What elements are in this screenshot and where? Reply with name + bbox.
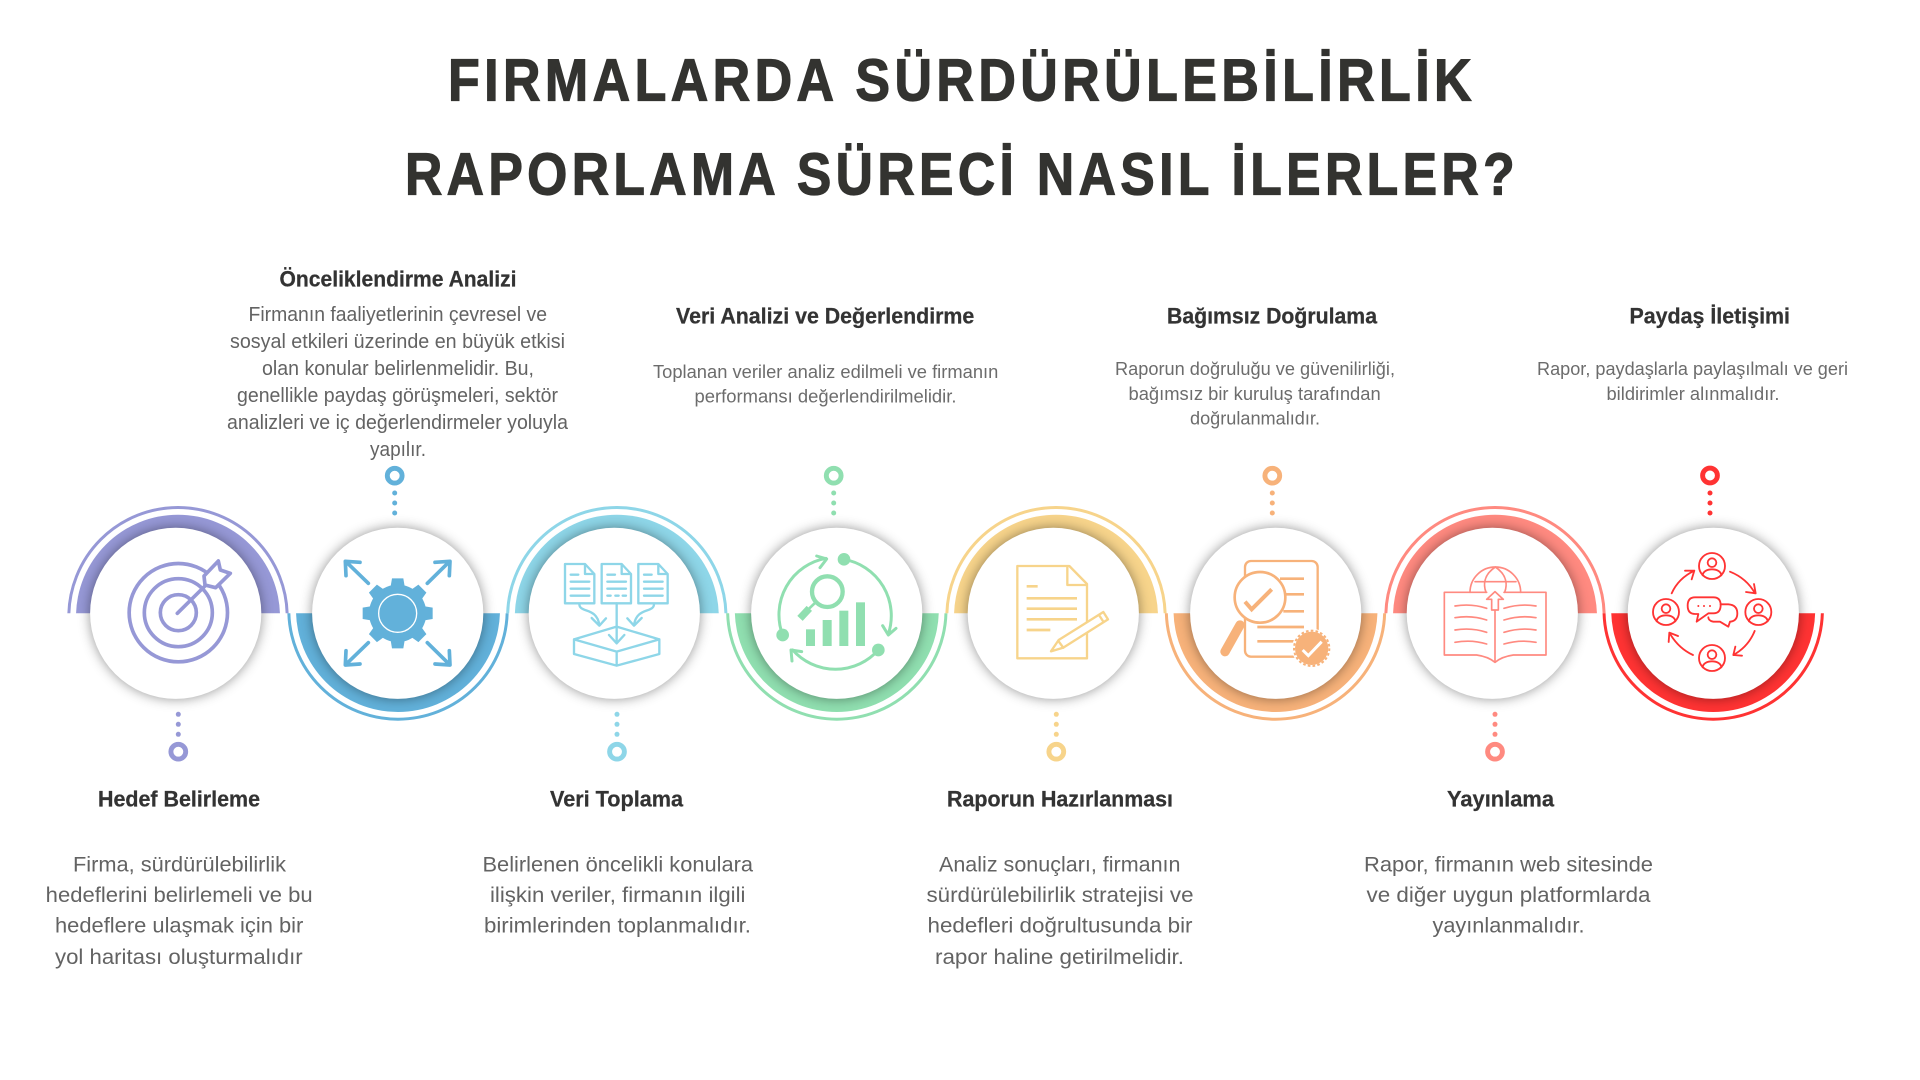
description: yol haritası oluşturmalıdır xyxy=(55,945,303,969)
arc band salmon xyxy=(1384,506,1606,614)
icon: open book and globe xyxy=(1444,567,1546,662)
description xyxy=(227,304,569,461)
white circle xyxy=(1407,528,1578,699)
white circle xyxy=(751,528,922,699)
description: ve diğer uygun platformlarda xyxy=(1366,883,1651,907)
description: ilişkin veriler, firmanın ilgili xyxy=(490,883,746,907)
icon: gear with arrows xyxy=(345,561,450,665)
icon: verified report xyxy=(1225,561,1331,668)
description: olan konular belirlenmelidir. Bu, xyxy=(262,358,534,380)
title: FIRMALARDA SÜRDÜRÜLEBİLİRLİK xyxy=(448,48,1476,114)
step 4: Veri Analizi ve Değerlendirme xyxy=(653,303,998,719)
description: performansı değerlendirilmelidir. xyxy=(694,386,956,406)
heading: Önceliklendirme Analizi xyxy=(280,266,516,292)
description: Belirlenen öncelikli konulara xyxy=(482,852,753,876)
description xyxy=(653,362,998,406)
step 7: Yayınlama xyxy=(1364,508,1653,938)
description xyxy=(926,852,1194,969)
description: yayınlanmalıdır. xyxy=(1432,914,1584,938)
description xyxy=(1537,359,1848,404)
arc band purple xyxy=(67,506,289,614)
heading: Raporun Hazırlanması xyxy=(947,787,1173,812)
icon: stakeholders communication xyxy=(1653,553,1771,671)
icon: document and pencil xyxy=(1017,566,1108,658)
description xyxy=(482,852,753,938)
white circle xyxy=(1628,528,1799,699)
white circle xyxy=(968,528,1139,699)
description: birimlerinden toplanmalıdır. xyxy=(484,914,751,938)
heading: Veri Toplama xyxy=(550,787,684,812)
description: Rapor, firmanın web sitesinde xyxy=(1364,852,1653,876)
heading: Paydaş İletişimi xyxy=(1630,303,1790,328)
description: Firma, sürdürülebilirlik xyxy=(73,852,286,876)
icon: target xyxy=(129,561,230,662)
arc band red xyxy=(1602,613,1824,721)
pin xyxy=(171,712,186,759)
white circle xyxy=(529,528,700,699)
description: analizleri ve iç değerlendirmeler yoluyla xyxy=(227,412,569,434)
description: Toplanan veriler analiz edilmeli ve firmanın xyxy=(653,362,998,382)
description: Analiz sonuçları, firmanın xyxy=(939,852,1180,876)
white circle xyxy=(1190,528,1361,699)
step 2: Önceliklendirme Analizi xyxy=(227,266,569,719)
pin xyxy=(610,712,624,759)
description xyxy=(1364,852,1653,938)
description: hedeflere ulaşmak için bir xyxy=(55,914,303,938)
step 1: Hedef Belirleme xyxy=(46,508,313,969)
icon: analysis cycle xyxy=(776,553,896,669)
description: sosyal etkileri üzerinde en büyük etkisi xyxy=(230,331,565,353)
description: bağımsız bir kuruluş tarafından xyxy=(1128,384,1381,404)
title xyxy=(405,48,1519,208)
description: Firmanın faaliyetlerinin çevresel ve xyxy=(248,304,547,326)
pin xyxy=(1488,712,1502,759)
description xyxy=(46,852,313,969)
description: Raporun doğruluğu ve güvenilirliği, xyxy=(1115,359,1395,379)
description: doğrulanmalıdır. xyxy=(1190,408,1320,428)
step 3: Veri Toplama xyxy=(482,508,753,938)
white circle xyxy=(312,528,483,699)
step 6: Bağımsız Doğrulama xyxy=(1115,303,1395,719)
pin xyxy=(1265,468,1280,516)
description: yapılır. xyxy=(370,439,426,461)
description: genellikle paydaş görüşmeleri, sektör xyxy=(237,385,558,407)
pin xyxy=(826,468,841,516)
arc band blue xyxy=(287,613,509,721)
icon: documents into box xyxy=(565,564,668,666)
description: bildirimler alınmalıdır. xyxy=(1606,384,1780,404)
heading: Hedef Belirleme xyxy=(98,787,260,812)
arc band green xyxy=(726,613,948,721)
heading: Veri Analizi ve Değerlendirme xyxy=(676,303,974,328)
description: sürdürülebilirlik stratejisi ve xyxy=(926,883,1194,907)
title: RAPORLAMA SÜRECİ NASIL İLERLER? xyxy=(405,142,1519,208)
description xyxy=(1115,359,1395,428)
pin xyxy=(1703,468,1717,516)
arc band yellow xyxy=(945,506,1167,614)
arc band light blue xyxy=(506,506,728,614)
description: rapor haline getirilmelidir. xyxy=(935,945,1184,969)
heading: Yayınlama xyxy=(1447,787,1555,812)
step 8: Paydaş İletişimi xyxy=(1537,303,1848,719)
arc band orange xyxy=(1164,613,1386,721)
pin xyxy=(387,468,402,516)
white circle xyxy=(90,528,261,699)
step 5: Raporun Hazırlanması xyxy=(926,508,1194,969)
description: hedefleri doğrultusunda bir xyxy=(928,914,1192,938)
description: Rapor, paydaşlarla paylaşılmalı ve geri xyxy=(1537,359,1848,379)
pin xyxy=(1049,712,1064,759)
description: hedeflerini belirlemeli ve bu xyxy=(46,883,313,907)
heading: Bağımsız Doğrulama xyxy=(1167,303,1378,328)
